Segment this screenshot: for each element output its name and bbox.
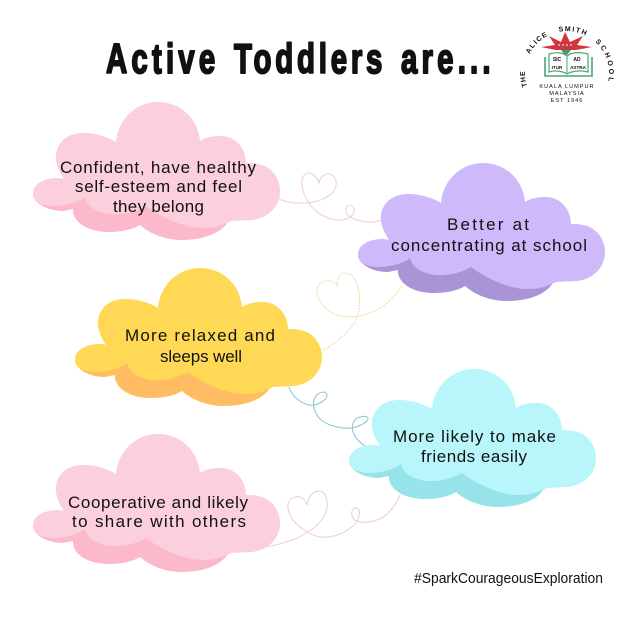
logo red starburst bbox=[541, 32, 592, 56]
logo arc lettering bbox=[520, 26, 614, 88]
logo location text bbox=[539, 84, 595, 104]
logo arc lettering: ALICE bbox=[526, 32, 548, 54]
cloud: relaxed bbox=[75, 268, 322, 406]
logo open book: AD bbox=[573, 57, 581, 63]
logo arc lettering: SMITH bbox=[558, 26, 587, 36]
logo open book bbox=[545, 53, 592, 76]
cloud text: friends easily bbox=[421, 447, 528, 466]
cloud: cooperative bbox=[33, 434, 280, 572]
cloud text bbox=[60, 158, 256, 216]
cloud text: Confident, have healthy bbox=[60, 158, 256, 177]
connector: yellow dotted heart to purple cloud bbox=[317, 273, 402, 350]
logo open book: ASTRA bbox=[570, 65, 587, 70]
title: Toddlers bbox=[234, 35, 382, 82]
cloud shape: pink bottom left bbox=[33, 434, 280, 572]
cloud shape: pink top left bbox=[33, 102, 280, 240]
school logo bbox=[520, 26, 614, 104]
cloud text bbox=[68, 493, 248, 531]
connector: pink heart to purple cloud bbox=[278, 173, 382, 222]
logo location text: EST 1946 bbox=[551, 98, 583, 104]
cloud shape: purple bbox=[358, 163, 605, 301]
cloud text: More likely to make bbox=[393, 427, 556, 446]
cloud text: concentrating at school bbox=[391, 236, 587, 255]
cloud text: Cooperative and likely bbox=[68, 493, 248, 512]
connector: blue loops to blue cloud bbox=[289, 387, 368, 446]
logo open book: ITUR bbox=[552, 65, 563, 70]
cloud text: self-esteem and feel bbox=[75, 177, 242, 196]
hashtag: #SparkCourageousExploration bbox=[414, 571, 603, 587]
cloud text bbox=[393, 427, 556, 466]
logo location text: KUALA LUMPUR bbox=[539, 84, 595, 90]
cloud text bbox=[125, 326, 275, 366]
cloud text: More relaxed and bbox=[125, 326, 275, 345]
cloud text bbox=[391, 215, 587, 255]
title bbox=[106, 35, 491, 82]
title: are... bbox=[401, 35, 491, 82]
cloud shape: yellow bbox=[75, 268, 322, 406]
logo location text: MALAYSIA bbox=[549, 91, 585, 97]
cloud: confident bbox=[33, 102, 280, 240]
logo arc lettering: THE bbox=[520, 72, 527, 88]
logo arc lettering: SCHOOL bbox=[596, 39, 614, 81]
cloud: friends bbox=[349, 369, 596, 507]
cloud: concentrating bbox=[358, 163, 605, 301]
title: Active bbox=[106, 35, 215, 82]
cloud text: sleeps well bbox=[160, 347, 242, 366]
logo open book: SIC bbox=[553, 57, 562, 63]
cloud text: they belong bbox=[113, 197, 204, 216]
cloud text: Better at bbox=[447, 215, 529, 234]
connector: pink heart to blue cloud bbox=[263, 491, 400, 547]
cloud text: to share with others bbox=[72, 512, 246, 531]
cloud shape: blue bbox=[349, 369, 596, 507]
